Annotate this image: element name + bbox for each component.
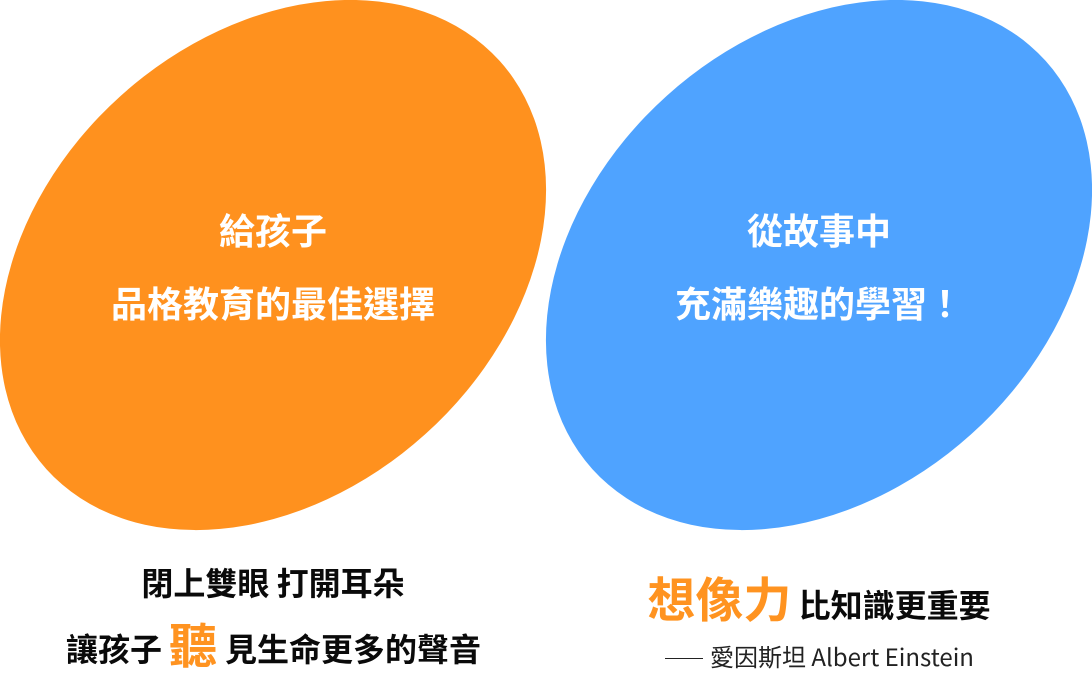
orange ellipse text line 2: 品格教育的最佳選擇 [111, 276, 435, 328]
right caption line 1: 想像力 比知識更重要 [647, 561, 991, 631]
attribution: 愛因斯坦 Albert Einstein [710, 638, 974, 673]
left caption line 2: 見生命更多的聲音 [225, 625, 481, 671]
left caption line 2: 聽 [169, 607, 217, 677]
left caption line 2: 讓孩子 [66, 625, 162, 671]
left caption line 2 [66, 607, 481, 677]
blue ellipse text: 從故事中 [747, 203, 891, 255]
left caption line 1: 閉上雙眼 打開耳朵 [141, 559, 405, 605]
blue ellipse text line 2: 充滿樂趣的學習！ [675, 276, 963, 328]
orange ellipse text: 給孩子 [219, 203, 327, 255]
